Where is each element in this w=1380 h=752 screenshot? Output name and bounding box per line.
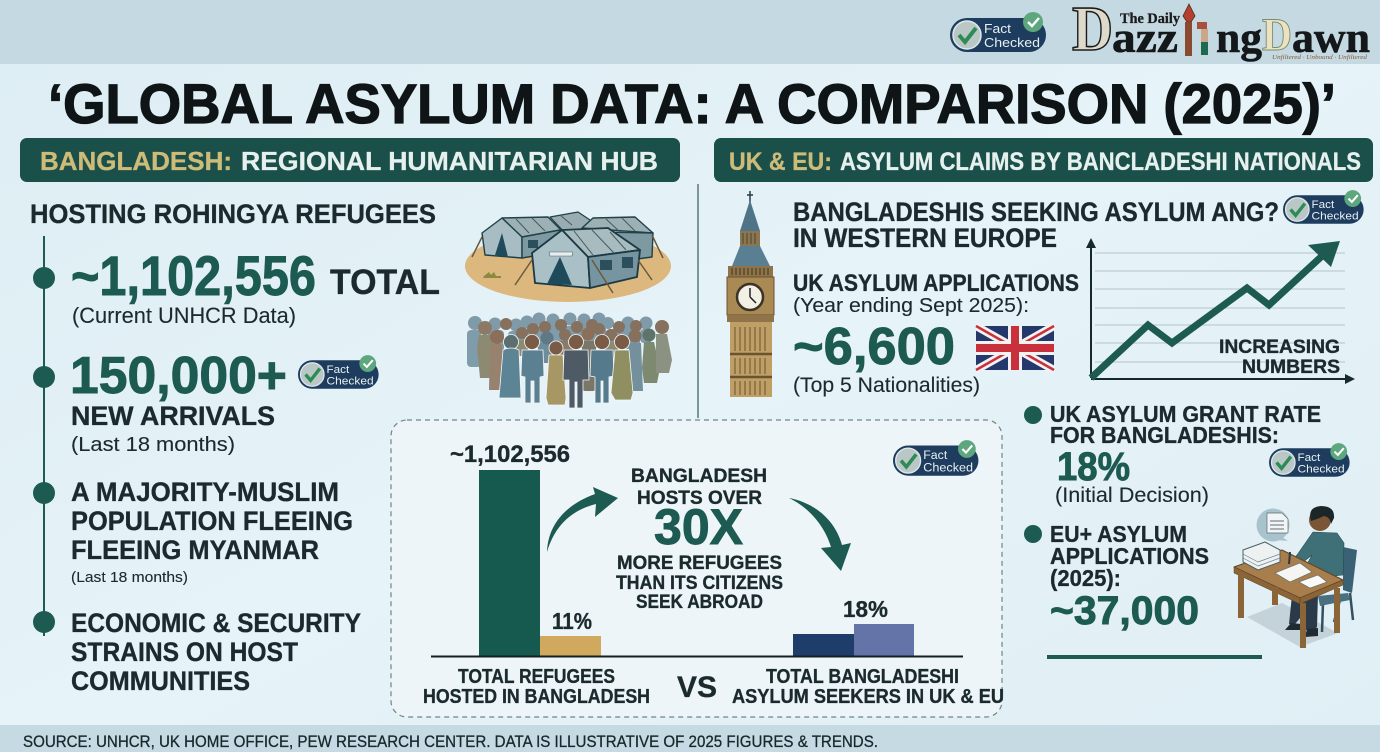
source line: SOURCE: UNHCR, UK HOME OFFICE, PEW RESEARCH CENTER. DATA IS ILLUSTRATIVE OF 2025 FIGURES & TRENDS.	[23, 732, 878, 751]
icon: refugee tents	[465, 212, 671, 302]
timeline	[33, 236, 55, 636]
badge: fact checked, arrivals	[298, 355, 379, 389]
badge: fact checked, grant rate: Fact	[1298, 452, 1320, 464]
text: UK asylum applications: ~6,600	[793, 318, 955, 376]
callout: hosts over 30X: SEEK ABROAD	[636, 592, 763, 613]
logo: The Daily Dazzling Dawn: Unfiltered · Unbound · Unfiltered	[1272, 54, 1368, 61]
logo: The Daily Dazzling Dawn	[1072, 0, 1370, 64]
text: majority-Muslim population: POPULATION FLEEING	[71, 506, 353, 536]
badge: fact checked, grant rate: Checked	[1298, 464, 1345, 476]
badge: fact checked, arrivals: Fact	[327, 364, 349, 376]
logo: The Daily Dazzling Dawn: awn	[1292, 15, 1370, 62]
badge: fact checked, header: Fact	[984, 21, 1011, 36]
icon: Big Ben	[727, 191, 774, 397]
bar chart: 18%	[843, 596, 888, 622]
heading bar: Bangladesh: BANGLADESH:	[40, 146, 232, 176]
bar chart	[431, 441, 963, 656]
arrow: to asylum seekers	[789, 498, 851, 571]
label: asylum seekers: ASYLUM SEEKERS IN UK & EU	[732, 686, 1004, 708]
stat: total refugees: (Current UNHCR Data)	[72, 303, 296, 328]
footer band	[0, 725, 1380, 752]
front row people	[499, 334, 633, 408]
label: refugees hosted	[423, 666, 650, 708]
stat: EU applications	[1024, 521, 1262, 659]
line chart: increasing numbers: NUMBERS	[1242, 357, 1340, 378]
label: asylum seekers	[732, 666, 1004, 708]
badge: fact checked, chart	[893, 440, 978, 476]
icon: UK flag	[976, 326, 1054, 370]
badge: fact checked, western Europe: Checked	[1312, 211, 1359, 223]
title: ‘GLOBAL ASYLUM DATA: A COMPARISON (2025)’	[48, 72, 1336, 135]
stat: total refugees: TOTAL	[330, 263, 440, 302]
badge: fact checked, grant rate	[1269, 443, 1350, 477]
label: refugees hosted: TOTAL REFUGEES	[458, 666, 615, 688]
text: economic and security strains: STRAINS ON HOST	[71, 637, 298, 667]
badge: fact checked, western Europe	[1283, 190, 1364, 224]
middle row bodies	[477, 320, 672, 391]
badge: fact checked, header	[950, 12, 1046, 52]
stat: new arrivals: (Last 18 months)	[71, 434, 235, 456]
label: asylum seekers: TOTAL BANGLADESHI	[766, 666, 959, 688]
stat: UK grant rate	[1024, 401, 1321, 507]
stat: total refugees	[71, 244, 440, 328]
text: economic and security strains: ECONOMIC & SECURITY	[71, 608, 361, 638]
heading: seeking asylum: BANGLADESHIS SEEKING ASYLUM ANG?	[793, 197, 1279, 227]
header band	[0, 0, 1380, 64]
heading bar: Bangladesh: REGIONAL HUMANITARIAN HUB	[241, 146, 658, 176]
heading bar: UK and EU: UK & EU:	[729, 148, 832, 176]
panel: UK applications	[793, 197, 1279, 397]
text: majority-Muslim population: (Last 18 months)	[71, 569, 188, 586]
line chart: increasing numbers	[1086, 238, 1355, 384]
stat: EU applications: EU+ ASYLUM	[1050, 521, 1187, 547]
badge: fact checked, chart: Fact	[923, 450, 948, 462]
panel: hosting Rohingya refugees	[30, 199, 440, 696]
back row heads	[468, 312, 652, 332]
callout: hosts over 30X: 30X	[654, 499, 743, 555]
callout: hosts over 30X: BANGLADESH	[631, 466, 767, 487]
text: majority-Muslim population	[71, 477, 353, 586]
heading bar: UK and EU	[714, 138, 1373, 182]
text: UK asylum applications	[793, 270, 1079, 397]
label: refugees hosted: HOSTED IN BANGLADESH	[423, 686, 650, 708]
text: majority-Muslim population: FLEEING MYANMAR	[71, 535, 319, 565]
label: VS: VS	[677, 671, 717, 704]
heading bar: Bangladesh	[20, 138, 680, 182]
badge: fact checked, header: Checked	[984, 35, 1040, 50]
stat: total refugees: ~1,102,556	[71, 244, 316, 307]
logo: The Daily Dazzling Dawn: The Daily	[1120, 11, 1180, 27]
bar chart: ~1,102,556	[450, 441, 570, 468]
heading: seeking asylum: IN WESTERN EUROPE	[793, 223, 1057, 253]
text: UK asylum applications: (Top 5 Nationalities)	[793, 374, 980, 397]
stat: new arrivals: 150,000+	[70, 347, 287, 405]
callout: hosts over 30X	[616, 466, 783, 613]
back row bodies	[467, 326, 652, 367]
text: UK asylum applications: (Year ending Sept 2025):	[793, 295, 1029, 317]
stat: new arrivals: NEW ARRIVALS	[71, 401, 275, 431]
text: majority-Muslim population: A MAJORITY-MUSLIM	[71, 477, 339, 507]
stat: new arrivals	[70, 347, 287, 456]
logo: The Daily Dazzling Dawn: D	[1262, 9, 1292, 61]
stat: UK grant rate: UK ASYLUM GRANT RATE	[1050, 401, 1321, 427]
stat: UK grant rate: FOR BANGLADESHIS:	[1050, 422, 1279, 448]
stat: EU applications: APPLICATIONS	[1050, 543, 1209, 569]
arrow: to callout	[547, 487, 618, 552]
text: UK asylum applications: UK ASYLUM APPLICATIONS	[793, 270, 1079, 297]
heading: hosting: HOSTING ROHINGYA REFUGEES	[30, 199, 436, 229]
bar chart: 11%	[552, 608, 592, 634]
logo: The Daily Dazzling Dawn: ng	[1216, 15, 1262, 62]
line chart: increasing numbers: INCREASING	[1219, 337, 1340, 358]
callout: hosts over 30X: MORE REFUGEES	[617, 553, 782, 574]
stat: EU applications: (2025):	[1050, 565, 1121, 591]
heading: seeking asylum	[793, 197, 1279, 253]
text: economic and security strains: COMMUNITIES	[71, 666, 250, 696]
callout: hosts over 30X: THAN ITS CITIZENS	[616, 573, 783, 594]
badge: fact checked, western Europe: Fact	[1312, 199, 1334, 211]
callout: hosts over 30X: HOSTS OVER	[637, 488, 762, 509]
icon: person at desk	[1234, 506, 1357, 648]
stat: EU applications: ~37,000	[1050, 589, 1199, 633]
stat: UK grant rate: 18%	[1057, 445, 1130, 489]
middle row heads	[500, 318, 642, 341]
text: economic and security strains	[71, 608, 361, 696]
badge: fact checked, arrivals: Checked	[327, 376, 374, 388]
badge: fact checked, chart: Checked	[923, 462, 973, 474]
logo: The Daily Dazzling Dawn: azz	[1112, 15, 1178, 62]
stat: UK grant rate: (Initial Decision)	[1055, 484, 1209, 507]
icon: crowd of refugees	[467, 312, 672, 408]
panel: comparison chart	[391, 420, 1004, 717]
